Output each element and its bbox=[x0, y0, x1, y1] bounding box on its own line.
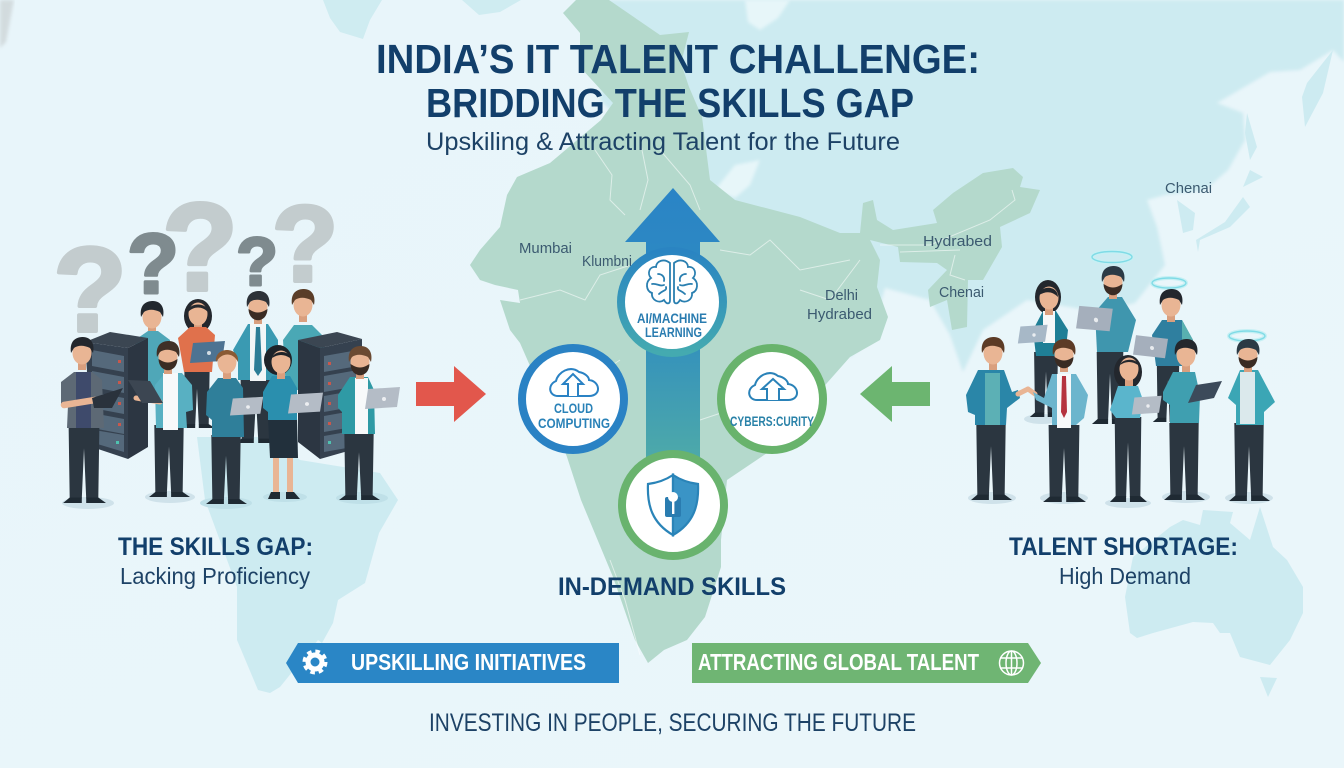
person: bearded man with halo bbox=[1225, 331, 1275, 504]
label: talent shortage bbox=[1009, 533, 1238, 589]
person: woman with tablet at back bbox=[1018, 280, 1068, 424]
banner: attracting global talent bbox=[692, 643, 1041, 683]
label: the skills gap bbox=[118, 533, 313, 589]
city labels bbox=[519, 181, 1212, 323]
person: man in blue cardigan bbox=[966, 337, 1028, 504]
arrow: green pointing left bbox=[860, 366, 930, 422]
server rack left bbox=[85, 332, 148, 459]
label: CLOUD bbox=[554, 401, 593, 416]
icon: gear bbox=[304, 652, 326, 672]
map: india and neighbouring region bbox=[470, 0, 1040, 663]
question marks: ? bbox=[272, 183, 338, 304]
person: short haired man in dark teal vest bbox=[200, 350, 263, 509]
label bbox=[637, 311, 707, 340]
city labels: Chenai bbox=[1165, 181, 1212, 197]
banner: upskilling initiatives bbox=[286, 643, 619, 683]
icon: shield with keyhole bbox=[648, 475, 698, 535]
city labels: Mumbai bbox=[519, 241, 572, 257]
question marks: ? bbox=[236, 224, 278, 300]
label: LEARNING bbox=[645, 325, 702, 340]
label: AI/MACHINE bbox=[637, 311, 707, 326]
question marks: ? bbox=[127, 217, 179, 312]
map: south america bbox=[197, 437, 398, 693]
arrow: red pointing right bbox=[416, 366, 486, 422]
question marks: ? bbox=[53, 223, 127, 357]
label: CYBERS:CURITY bbox=[730, 414, 814, 429]
city labels: Delhi bbox=[825, 288, 858, 304]
person: man with red tie bbox=[1028, 339, 1088, 504]
icon: cloud upload bbox=[550, 369, 598, 396]
title bbox=[376, 36, 980, 126]
skill: security shield bbox=[622, 454, 724, 556]
label: in-demand skills: IN-DEMAND SKILLS bbox=[558, 573, 786, 601]
server rack right bbox=[298, 332, 362, 459]
people group: talent shortage bbox=[966, 252, 1275, 508]
person: back man in teal bbox=[135, 301, 170, 395]
city labels: Hydrabed bbox=[923, 234, 992, 250]
icon: globe bbox=[1000, 651, 1024, 675]
banner: upskilling initiatives: UPSKILLING INITIATIVES bbox=[351, 649, 586, 675]
title: INDIA’S IT TALENT CHALLENGE: bbox=[376, 36, 980, 82]
label: COMPUTING bbox=[538, 416, 610, 431]
person: man in teal tee with dark laptop bbox=[1162, 339, 1222, 503]
person: man with teal blazer and tie bbox=[233, 291, 278, 443]
label: the skills gap: THE SKILLS GAP: bbox=[118, 533, 313, 561]
people group: the skills gap bbox=[61, 289, 400, 509]
city labels: Chenai bbox=[939, 285, 984, 301]
skill: AI / machine learning bbox=[621, 251, 723, 353]
label: talent shortage: High Demand bbox=[1059, 563, 1191, 589]
person: man in grey with tablet bbox=[61, 337, 123, 509]
city labels: Hydrabed bbox=[807, 307, 872, 323]
skill: cloud computing bbox=[522, 348, 624, 450]
banner: attracting global talent: ATTRACTING GLOBAL TALENT bbox=[698, 649, 979, 675]
map: australia bbox=[1125, 507, 1303, 697]
central upward arrow bbox=[625, 188, 720, 480]
question marks bbox=[53, 179, 338, 357]
person: woman in blue with skirt bbox=[263, 345, 323, 502]
title: BRIDDING THE SKILLS GAP bbox=[426, 80, 914, 126]
person: bearded man with laptop bbox=[128, 341, 195, 503]
person: bearded man with teal jacket bbox=[336, 346, 400, 504]
subtitle: Upskiling & Attracting Talent for the Future bbox=[426, 128, 900, 156]
person: man with halo and laptop bbox=[1133, 278, 1193, 422]
question marks: ? bbox=[162, 179, 238, 317]
person: woman with laptop bbox=[1105, 355, 1162, 508]
city labels: Klumbni bbox=[582, 254, 632, 270]
label: talent shortage: TALENT SHORTAGE: bbox=[1009, 533, 1238, 561]
tagline: INVESTING IN PEOPLE, SECURING THE FUTURE bbox=[429, 709, 916, 737]
person: tall bearded man with halo and laptop bbox=[1076, 252, 1136, 424]
label bbox=[538, 401, 610, 431]
person: woman in orange bbox=[178, 299, 225, 428]
person: man in teal at back right bbox=[283, 289, 325, 390]
label: the skills gap: Lacking Proficiency bbox=[120, 563, 310, 589]
icon: brain bbox=[647, 260, 697, 303]
skill: cybersecurity bbox=[721, 348, 823, 450]
icon: cloud upload bbox=[749, 373, 797, 400]
